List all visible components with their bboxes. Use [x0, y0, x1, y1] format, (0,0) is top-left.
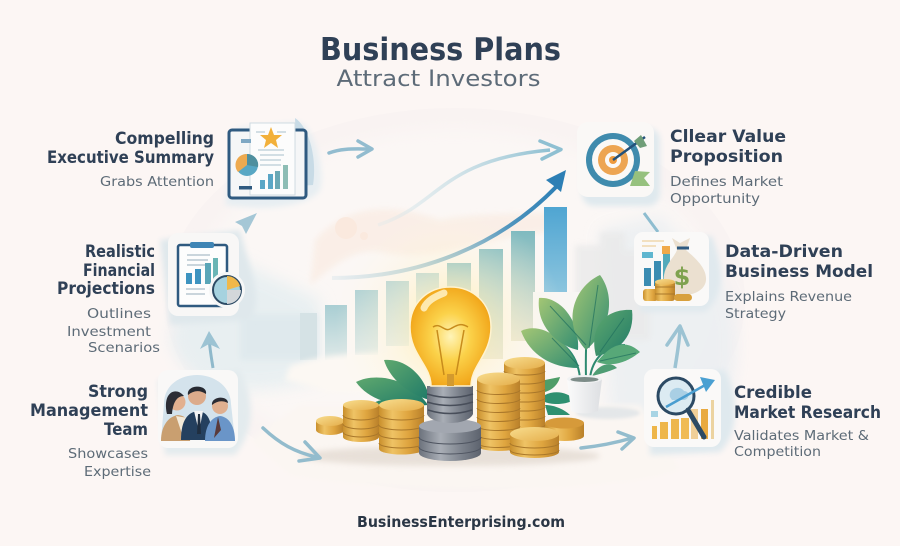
- label: financial projections: [57, 242, 160, 356]
- label: executive summary: Compelling: [115, 129, 214, 149]
- mini bars: [260, 165, 288, 189]
- label: business model: Strategy: [725, 306, 786, 322]
- label: management team: Expertise: [84, 464, 151, 480]
- growth bar chart: [285, 207, 593, 395]
- label: value proposition: [670, 127, 786, 207]
- icon: money bag business model: [634, 232, 721, 312]
- icon: target: [577, 122, 660, 206]
- icon: financial projections clipboard: [160, 230, 256, 325]
- icon: market research magnifier: [644, 369, 735, 455]
- arrow: team to coins: [263, 428, 320, 461]
- central backdrop scene: [165, 108, 745, 492]
- label: business model: [725, 242, 873, 322]
- coin stacks: [300, 357, 600, 466]
- potted plant: [521, 275, 640, 419]
- label: financial projections: Scenarios: [88, 340, 160, 356]
- label: value proposition: Opportunity: [670, 191, 760, 207]
- label: value proposition: Cllear Value: [670, 127, 786, 147]
- label: financial projections: Financial: [83, 261, 155, 281]
- rising growth arrow: [332, 170, 566, 278]
- label: management team: Strong: [88, 382, 148, 402]
- footer website: BusinessEnterprising.com: [357, 513, 565, 531]
- label: value proposition: Defines Market: [670, 174, 783, 190]
- subtitle: Attract Investors: [336, 67, 540, 92]
- label: business model: Business Model: [725, 262, 873, 282]
- label: management team: [30, 382, 151, 480]
- label: market research: Validates Market &: [734, 428, 870, 444]
- lightbulb: [410, 287, 491, 461]
- title: Business Plans: [320, 32, 561, 68]
- icon: management team: [158, 370, 251, 455]
- arrow: to value proposition: [378, 141, 561, 225]
- label: value proposition: Proposition: [670, 147, 783, 167]
- back leaves: [356, 360, 574, 415]
- label: market research: Competition: [734, 444, 821, 460]
- arrow: market research to business model: [667, 326, 688, 368]
- label: management team: Management: [30, 401, 148, 421]
- label: market research: [734, 383, 881, 460]
- light burst and glow: [335, 210, 565, 440]
- label: financial projections: Realistic: [85, 242, 155, 262]
- label: financial projections: Outlines: [87, 306, 151, 322]
- label: management team: Team: [104, 420, 148, 440]
- label: executive summary: Executive Summary: [47, 148, 214, 168]
- label: market research: Market Research: [734, 403, 881, 423]
- arrow: projections to summary: [235, 213, 257, 234]
- label: management team: Showcases: [68, 446, 148, 462]
- label: market research: Credible: [734, 383, 812, 403]
- arrow: value proposition to business model: [644, 213, 658, 232]
- label: business model: Data-Driven: [725, 242, 843, 262]
- pie chart: [235, 154, 258, 176]
- label: business model: Explains Revenue: [725, 289, 852, 305]
- pie badge: [209, 272, 245, 308]
- label: financial projections: Projections: [57, 279, 155, 299]
- label: executive summary: [47, 129, 214, 190]
- star: [260, 127, 282, 148]
- icon: money bag business model: $: [674, 263, 690, 291]
- icon: executive summary document: [225, 118, 321, 208]
- label: financial projections: Investment: [67, 324, 151, 340]
- arrow: summary onward: [329, 141, 372, 157]
- arrow: coins to market research: [581, 432, 634, 449]
- arrow: team to projections: [200, 331, 220, 368]
- label: executive summary: Grabs Attention: [100, 174, 214, 190]
